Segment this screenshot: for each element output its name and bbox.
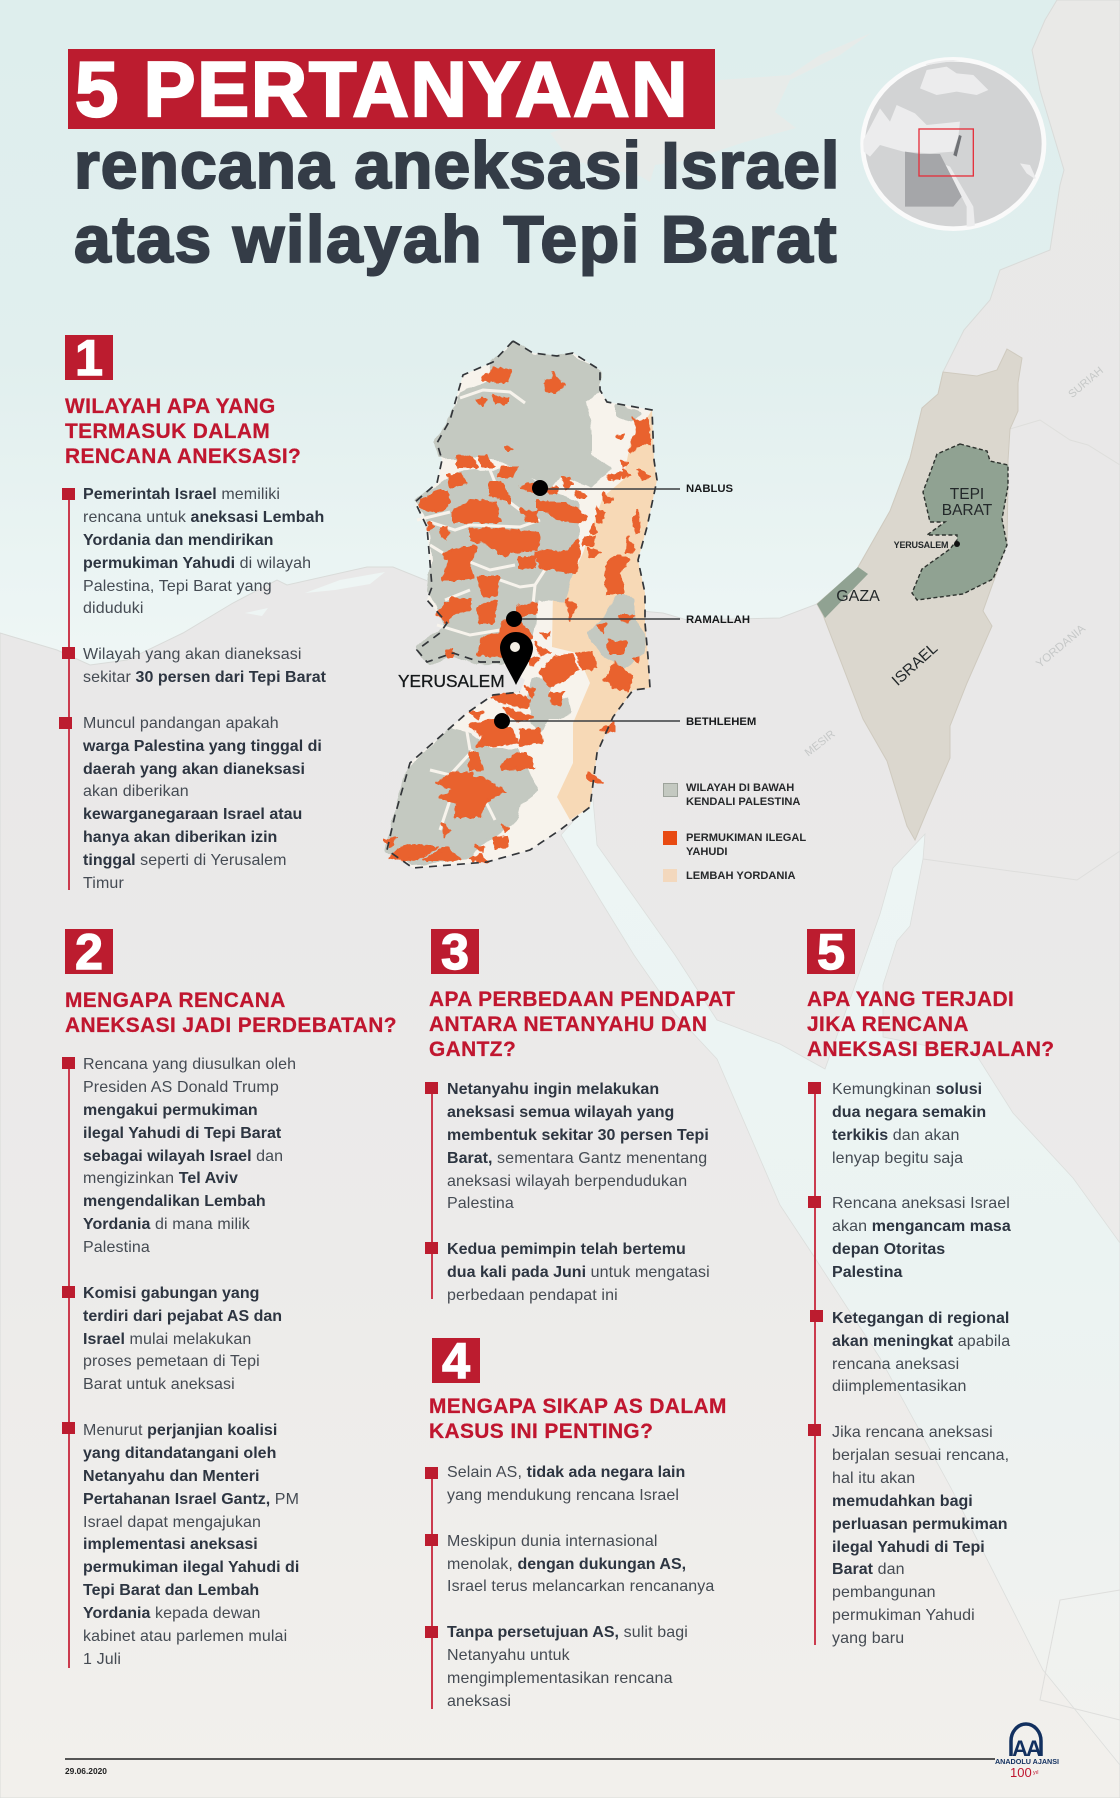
number badge 2: 2 (75, 924, 103, 980)
number badge 5 (807, 929, 855, 974)
label: Ramallah: RAMALLAH (686, 614, 750, 626)
number badge 4: 4 (442, 1333, 470, 1389)
legend (663, 782, 806, 882)
bullet 5.1 (808, 1082, 821, 1094)
bullet 2.3 (62, 1422, 75, 1434)
bullets timeline 4 (431, 1473, 433, 1709)
label: Barat: BARAT (942, 502, 993, 519)
pin hole (510, 642, 520, 652)
Jordan Valley (552, 410, 657, 820)
Israeli settlements (385, 368, 650, 863)
Israel region map (803, 349, 1106, 840)
legend text: settlements: PERMUKIMAN ILEGAL (686, 832, 806, 844)
legend swatch: Jordan Valley (663, 869, 677, 882)
title block (68, 45, 840, 276)
heading 4: MENGAPA SIKAP AS DALAM KASUS INI PENTING? (429, 1395, 727, 1443)
bullet 5.3 (810, 1310, 823, 1322)
bullet 5.2 (808, 1196, 821, 1208)
bullet 1.1 (62, 488, 75, 500)
logo text: ANADOLU AJANSI (995, 1757, 1059, 1766)
number badge 4 (432, 1338, 480, 1383)
label: Gaza: GAZA (836, 588, 880, 605)
legend text line 2: KENDALI PALESTINA (686, 796, 800, 808)
number badge 5: 5 (817, 924, 845, 980)
heading 5: APA YANG TERJADI JIKA RENCANA ANEKSASI BERJALAN? (807, 988, 1054, 1061)
number badge 3: 3 (441, 924, 469, 980)
Gaza shape (817, 567, 868, 618)
heading 2: MENGAPA RENCANA ANEKSASI JADI PERDEBATAN? (65, 989, 397, 1037)
logo yil text: yıl (1033, 1770, 1038, 1776)
bullet 4.1 (425, 1467, 438, 1479)
locator globe (862, 50, 1044, 229)
bullet 1.2 (62, 647, 75, 659)
body text 2: Rencana yang diusulkan oleh Presiden AS Donald Trump mengakui permukiman ilegal Yahudi di Tepi Barat sebagai wilayah Israel dan mengizinkan Tel Aviv mengendalikan Lembah Yordania di mana milik Palestina Komisi gabungan yang terdiri dari pejabat AS dan Israel mulai melakukan proses pemetaan di Tepi Barat untuk aneksasi Menurut perjanjian koalisi yang ditandatangani oleh Netanyahu dan Menteri Pertahanan Israel Gantz, PM Israel dapat mengajukan implementasi aneksasi permukiman ilegal Yahudi di Tepi Barat dan Lembah Yordania kepada dewan kabinet atau parlemen mulai 1 Juli (83, 1056, 299, 1668)
title line 3: atas wilayah Tepi Barat (74, 202, 838, 276)
panel 5 (807, 924, 1054, 1647)
bullets timeline 5 (814, 1088, 816, 1645)
panel 4 (425, 1333, 727, 1710)
legend swatch: settlements (663, 831, 677, 845)
globe: Egypt highlighted (905, 152, 962, 207)
dashed border (387, 341, 657, 868)
label: Bethlehem: BETHLEHEM (686, 716, 756, 728)
title line 2: rencana aneksasi Israel (74, 128, 840, 202)
logo 100 years: 100 (1010, 1765, 1032, 1780)
marker: Ramallah (506, 611, 522, 627)
footer logo mark: AA (1012, 1736, 1042, 1761)
panel 1 (59, 330, 326, 892)
bullet 4.3 (425, 1626, 438, 1638)
title line 1: 5 PERTANYAAN (75, 45, 689, 133)
marker: Bethlehem (494, 713, 510, 729)
legend text: Jordan Valley: LEMBAH YORDANIA (686, 870, 796, 882)
number badge 1: 1 (75, 330, 103, 386)
label: Yerusalem: YERUSALEM (398, 671, 505, 691)
icon: Yerusalem pin (500, 632, 533, 685)
marker: Nablus (532, 480, 548, 496)
bullet 3.2 (425, 1242, 438, 1254)
legend swatch: Palestinian control (664, 784, 678, 796)
bullet 4.2 (425, 1534, 438, 1546)
bullet 3.1 (425, 1082, 438, 1094)
bullet 2.2 (62, 1286, 75, 1298)
globe seas (862, 50, 1037, 227)
bullets timeline 3 (431, 1088, 433, 1299)
legend text line 2: YAHUDI (686, 846, 728, 858)
Yerusalem mini marker (954, 541, 960, 547)
label: Nablus: NABLUS (686, 483, 734, 495)
label: Israel: ISRAEL (889, 640, 941, 689)
label: Suriah: SURIAH (1066, 365, 1106, 401)
legend text: Palestinian control: WILAYAH DI BAWAH (686, 782, 794, 794)
bullets timeline 1 (68, 490, 70, 890)
heading 3: APA PERBEDAAN PENDAPAT ANTARA NETANYAHU DAN GANTZ? (429, 988, 735, 1061)
globe: red locator rectangle (919, 129, 973, 176)
bullet 5.4 (808, 1424, 821, 1436)
body text 5: Kemungkinan solusi dua negara semakin terkikis dan akan lenyap begitu saja Rencana aneksasi Israel akan mengancam masa depan Otoritas Palestina Ketegangan di regional akan meningkat apabila rencana aneksasi diimplementasikan Jika rencana aneksasi berjalan sesuai rencana, hal itu akan memudahkan bagi perluasan permukiman ilegal Yahudi di Tepi Barat dan pembangunan permukiman Yahudi yang baru (832, 1081, 1011, 1647)
body text 1: Pemerintah Israel memiliki rencana untuk aneksasi Lembah Yordania dan mendirikan permukiman Yahudi di wilayah Palestina, Tepi Barat yang diduduki Wilayah yang akan dianeksasi sekitar 30 persen dari Tepi Barat Muncul pandangan apakah warga Palestina yang tinggal di daerah yang akan dianeksasi akan diberikan kewarganegaraan Israel atau hanya akan diberikan izin tinggal seperti di Yerusalem Timur (83, 486, 326, 892)
title red band (68, 49, 715, 129)
heading 1: WILAYAH APA YANG TERMASUK DALAM RENCANA ANEKSASI? (65, 395, 301, 468)
label: Mesir: MESIR (803, 728, 838, 759)
bullets timeline 2 (68, 1063, 70, 1668)
body text 4: Selain AS, tidak ada negara lain yang mendukung rencana Israel Meskipun dunia internasional menolak, dengan dukungan AS, Israel terus melancarkan rencananya Tanpa persetujuan AS, sulit bagi Netanyahu untuk mengimplementasikan rencana aneksasi (447, 1464, 714, 1710)
bullet 1.3 (59, 717, 72, 729)
outline base (387, 341, 657, 868)
label: Yordania: YORDANIA (1034, 623, 1088, 671)
panel 3 (425, 924, 735, 1304)
Palestinian-controlled areas (387, 343, 643, 863)
West Bank mini shape (912, 444, 1008, 600)
panel 2 (62, 924, 397, 1668)
bullet 2.1 (62, 1057, 75, 1069)
label: Yerusalem small: YERUSALEM (894, 540, 948, 550)
number badge 3 (431, 929, 479, 974)
cream veins between areas (417, 390, 548, 830)
pointer lines (502, 489, 680, 721)
footer date: 29.06.2020 (65, 1766, 107, 1776)
globe: Israel highlight (953, 135, 962, 157)
body text 3: Netanyahu ingin melakukan aneksasi semua wilayah yang membentuk sekitar 30 persen Tepi Barat, sementara Gantz menentang aneksasi wilayah berpendudukan Palestina Kedua pemimpin telah bertemu dua kali pada Juni untuk mengatasi perbedaan pendapat ini (447, 1081, 710, 1304)
number badge 2 (65, 929, 113, 974)
footer rule (65, 1758, 995, 1760)
label: Tepi Barat: TEPI (950, 486, 984, 503)
West Bank detail map (385, 341, 756, 868)
number badge 1 (65, 335, 113, 380)
footer logo mark (995, 1724, 1059, 1780)
